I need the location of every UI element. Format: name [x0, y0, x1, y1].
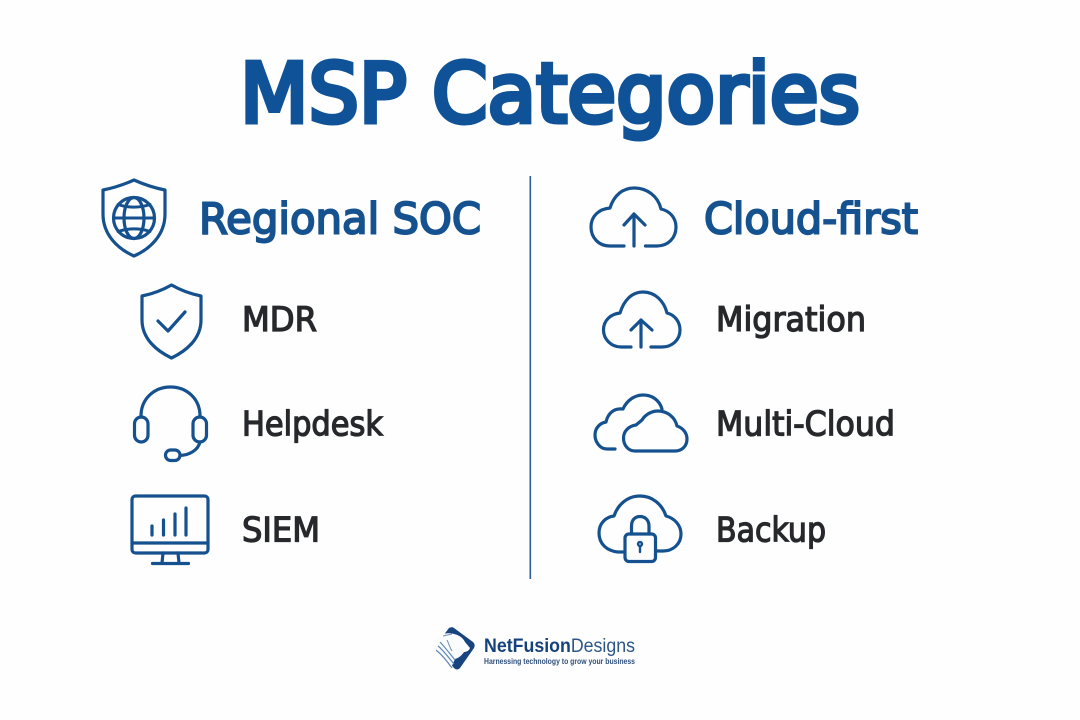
icon: multi-cloud [595, 395, 687, 451]
tagline: Harnessing technology to grow your business [484, 656, 635, 666]
heading: Cloud-first: Cloud-first [704, 196, 918, 244]
icon: monitor with bar chart [132, 496, 208, 564]
label: Backup: Backup [716, 510, 826, 550]
icon: shield with check [142, 285, 201, 358]
icon: shield with globe [103, 180, 165, 256]
label: SIEM: SIEM [242, 510, 320, 550]
label: Migration: Migration [716, 300, 866, 339]
icon: lion emblem [436, 627, 475, 670]
icon: headset [134, 387, 206, 460]
panel: Regional SOC [103, 180, 481, 564]
label: Multi-Cloud: Multi-Cloud [716, 404, 895, 444]
logo: NetFusionDesigns [436, 627, 635, 670]
divider [530, 176, 531, 579]
icon: cloud upload large [591, 188, 676, 246]
panel: Cloud-first [591, 188, 918, 562]
title: MSP Categories [240, 47, 860, 142]
wordmark: NetFusionDesigns [484, 636, 635, 657]
icon: cloud upload [604, 292, 680, 347]
icon: cloud with padlock [599, 496, 681, 562]
heading: Regional SOC: Regional SOC [199, 196, 481, 244]
label: MDR: MDR [242, 300, 317, 339]
label: Helpdesk: Helpdesk [242, 404, 384, 444]
